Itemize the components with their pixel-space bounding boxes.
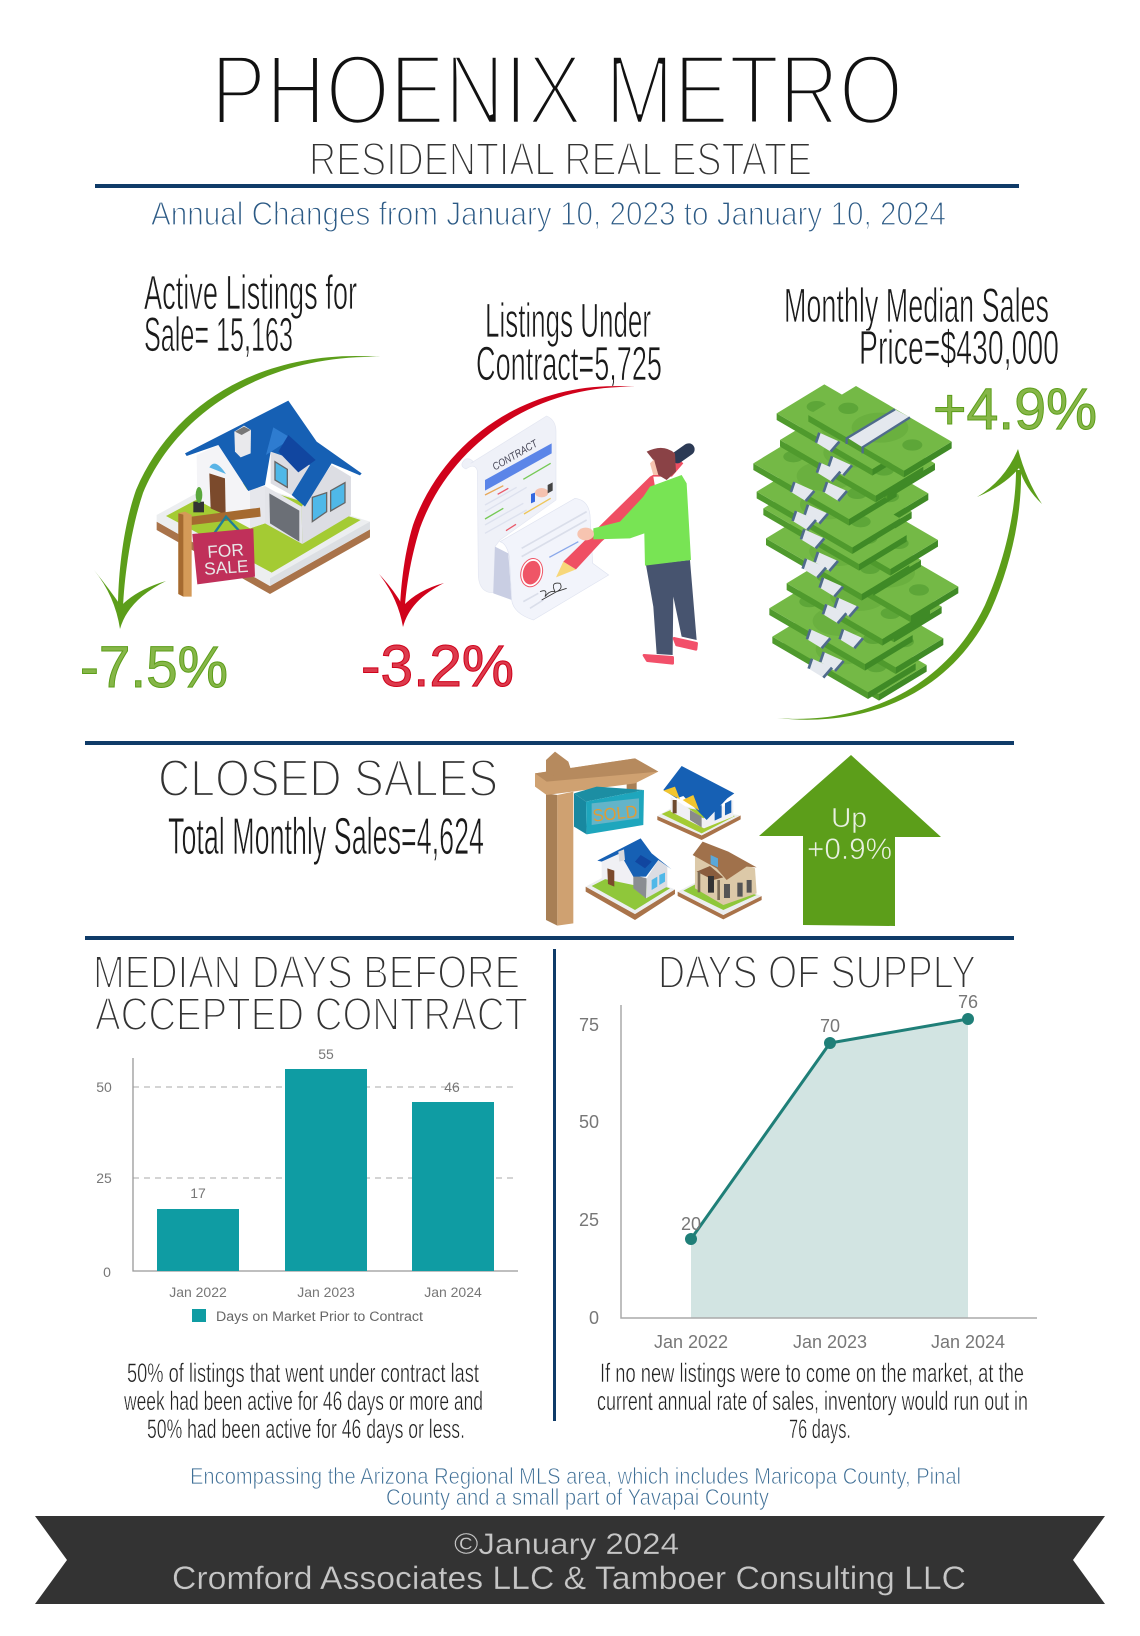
icon: sold sign and houses [535,752,762,926]
median days heading [93,946,528,1040]
icon: money stack [753,384,958,701]
footer banner: ©January 2024 [454,1528,679,1561]
small house: bottom right [678,842,762,919]
bar chart: Jan 2022 [169,1284,227,1300]
footer banner: Cromford Associates LLC & Tamboer Consulting LLC [172,1560,966,1596]
days of supply note [597,1358,1028,1444]
median days heading: ACCEPTED CONTRACT [95,988,528,1040]
small house: bottom left [586,838,675,920]
area line chart: 76 [958,992,978,1012]
icon: contract and person signing [462,416,697,663]
icon: house for sale: FOR [207,539,245,562]
under contract label: Listings Under [485,295,651,348]
total monthly sales: Total Monthly Sales=4,624 [168,808,484,866]
bar chart: 50 [96,1079,112,1095]
area line chart: 75 [579,1015,599,1035]
bar chart: 0 [103,1264,111,1280]
icon: house for sale: SALE [203,556,249,579]
area line chart: 20 [681,1214,701,1234]
area note: Encompassing the Arizona Regional MLS area, which includes Maricopa County, Pinal [190,1463,961,1489]
area line chart: Jan 2023 [793,1332,867,1352]
area line chart: 0 [589,1308,599,1328]
area line chart: 70 [820,1016,840,1036]
median days note [123,1358,483,1444]
arrow: green up [777,449,1042,720]
icon: house for sale [157,401,370,597]
percent: -3.2%: -3.2% [361,634,514,699]
active listings label [144,267,357,362]
arrow: green down [94,356,381,629]
date range heading: Annual Changes from January 10, 2023 to January 10, 2024 [151,195,946,232]
icon: sold sign and houses: SOLD [592,801,638,826]
bar chart: 25 [96,1170,112,1186]
area line chart [579,992,1037,1352]
small house: top right [657,766,741,840]
footer banner [35,1516,1105,1604]
days of supply note: 76 days. [789,1414,851,1444]
subtitle: RESIDENTIAL REAL ESTATE [309,133,812,185]
median price label [784,280,1059,375]
median days note: week had been active for 46 days or more and [123,1386,483,1416]
panel: median days [93,946,528,1444]
closed sales heading: CLOSED SALES [158,750,498,808]
arrow: red down [379,386,635,627]
median days note: 50% had been active for 46 days or less. [147,1414,465,1444]
panel: listings under contract [361,295,697,699]
area note: County and a small part of Yavapai County [386,1484,769,1510]
legend: Days on Market Prior to Contract [216,1309,423,1324]
active listings label: Active Listings for [144,267,357,320]
panel: median sales price [753,280,1097,720]
bar chart: 46 [444,1079,460,1095]
icon: contract and person signing: CONTRACT [490,437,541,473]
bar chart: 55 [318,1046,334,1062]
percent: +4.9%: +4.9% [933,377,1097,442]
area line chart: 50 [579,1112,599,1132]
bar chart [96,1046,518,1324]
arrow: up with change [759,755,941,926]
area line chart: 25 [579,1210,599,1230]
percent: -7.5%: -7.5% [80,635,228,700]
title: PHOENIX METRO [211,34,903,145]
under contract label: Contract=5,725 [476,338,662,391]
panel: active listings [80,267,381,700]
panel: closed sales [158,750,941,926]
under contract label [476,295,662,391]
active listings label: Sale= 15,163 [144,309,293,362]
arrow: up with change: +0.9% [807,833,892,866]
bar chart: Jan 2023 [297,1284,355,1300]
arrow: up with change: Up [831,802,867,833]
bar chart: Jan 2024 [424,1284,482,1300]
area note [190,1463,961,1510]
days of supply heading: DAYS OF SUPPLY [658,946,976,998]
panel: days of supply [579,946,1037,1444]
bar chart: 17 [190,1185,206,1201]
median days heading: MEDIAN DAYS BEFORE [93,946,520,998]
area line chart: Jan 2024 [931,1332,1005,1352]
median days note: 50% of listings that went under contract last [127,1358,479,1388]
area line chart: Jan 2022 [654,1332,728,1352]
